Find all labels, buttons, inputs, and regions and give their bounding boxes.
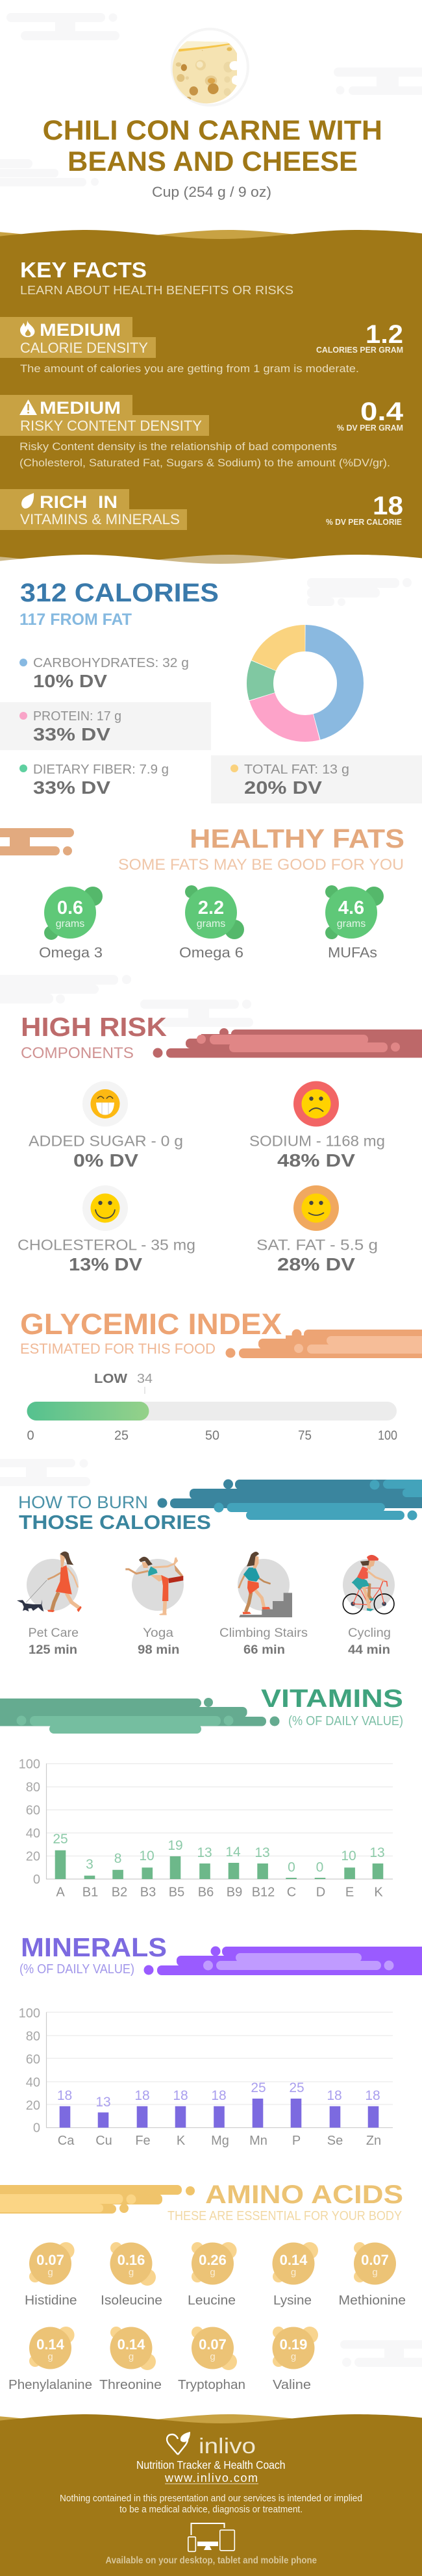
bubble: lysine: g [291, 2267, 296, 2278]
bubble: methionine: 0.07 [361, 2252, 389, 2268]
gauge: 34 [137, 1372, 153, 1386]
carbohydrates: CARBOHYDRATES: 32 g [33, 656, 189, 670]
bar chart: vitamins: B3 [140, 1885, 156, 1899]
fact: calorie density: 1.2 [366, 320, 403, 349]
activity: pet care: Pet Care [29, 1626, 79, 1640]
subheading: THESE ARE ESSENTIAL FOR YOUR BODY [168, 2209, 402, 2223]
bar chart: minerals: Se [327, 2134, 343, 2148]
bar chart: vitamins: 8 [114, 1851, 121, 1866]
decoration: teal bars [157, 1480, 422, 1520]
serving size: Cup (254 g / 9 oz) [152, 184, 271, 200]
bubble: valine: Valine [273, 2378, 311, 2392]
dietary fiber: 33% DV [33, 777, 110, 798]
disclaimer: to be a medical advice, diagnosis or treatment. [119, 2504, 303, 2515]
title: CHILI CON CARNE WITH [43, 115, 382, 146]
icon: woman on bicycle [343, 1555, 395, 1614]
decoration: red bars [153, 1028, 422, 1057]
protein: PROTEIN: 17 g [33, 709, 121, 724]
bubble: isoleucine: Isoleucine [101, 2293, 162, 2308]
bubble: tryptophan: g [210, 2351, 216, 2362]
bar chart: vitamins: 14 [225, 1845, 241, 1860]
icon: leaf [21, 493, 34, 509]
heading: HIGH RISK [21, 1012, 167, 1042]
bubble: leucine: 0.26 [199, 2252, 227, 2268]
bubble: threonine: 0.14 [118, 2336, 145, 2353]
bubble: MUFAs: grams [337, 918, 366, 929]
bar chart: minerals: 20 [26, 2099, 40, 2113]
bar chart: vitamins: 80 [26, 1780, 40, 1795]
logo: inlivo: inlivo [199, 2434, 256, 2458]
bar chart: minerals: 0 [33, 2121, 40, 2136]
bar chart: vitamins: 13 [254, 1845, 270, 1860]
decoration: purple bars [144, 1946, 422, 1975]
bar chart: minerals: 18 [327, 2088, 342, 2103]
icon: flame [20, 320, 34, 337]
sodium: SODIUM - 1168 mg [249, 1133, 385, 1150]
icon: mild smile [301, 1194, 331, 1222]
bar chart: minerals: 18 [134, 2088, 150, 2103]
heading: HOW TO BURN [18, 1493, 148, 1512]
bubble: isoleucine: 0.16 [118, 2252, 145, 2268]
bar chart: vitamins: 0 [33, 1873, 40, 1887]
activity: yoga: 98 min [138, 1643, 179, 1657]
bar chart: vitamins: 20 [26, 1850, 40, 1864]
bar chart: minerals: 13 [95, 2095, 111, 2110]
bar chart: minerals: Mg [211, 2134, 229, 2148]
icon: warning [19, 399, 37, 415]
subheading: 117 FROM FAT [19, 611, 132, 629]
fact: risky content density: RISKY CONTENT DENSITY [20, 418, 202, 434]
bubble: leucine [188, 2242, 237, 2308]
fact: rich in vitamins: VITAMINS & MINERALS [20, 511, 180, 527]
bar chart: minerals: 18 [57, 2088, 72, 2103]
sodium: 48% DV [277, 1150, 355, 1170]
decoration: green bars [0, 1698, 279, 1734]
bar chart: vitamins: 0 [288, 1860, 295, 1875]
bar chart: vitamins: B2 [112, 1885, 127, 1899]
disclaimer [60, 2493, 362, 2515]
bar chart: vitamins: 3 [86, 1857, 93, 1872]
bar chart: vitamins: D [316, 1885, 325, 1899]
bar chart: vitamins: 10 [341, 1849, 356, 1863]
bar chart: minerals: Mn [249, 2134, 267, 2148]
activity: yoga: Yoga [143, 1626, 173, 1640]
bar chart: minerals: 100 [19, 2006, 40, 2021]
bubble: lysine: Lysine [273, 2293, 312, 2308]
panel: minerals [19, 1932, 422, 2148]
protein [19, 709, 121, 744]
heading: AMINO ACIDS [205, 2180, 403, 2209]
bubble: MUFAs: 4.6 [338, 898, 364, 918]
bar chart: minerals: K [177, 2134, 186, 2148]
availability note: Available on your desktop, tablet and mobile phone [105, 2555, 317, 2566]
decoration: yellow bars [0, 2185, 195, 2214]
subheading: ESTIMATED FOR THIS FOOD [20, 1341, 216, 1357]
heading: GLYCEMIC INDEX [20, 1307, 282, 1341]
added sugar: ADDED SUGAR - 0 g [29, 1133, 183, 1150]
bar chart: minerals: 60 [26, 2052, 40, 2067]
total fat [230, 763, 349, 798]
bubble: valine: g [291, 2351, 296, 2362]
fact: calorie density: MEDIUM [40, 320, 121, 340]
bar chart: minerals: Fe [135, 2134, 151, 2148]
bubble: omega 3: 0.6 [57, 898, 83, 918]
bubble: isoleucine [101, 2242, 162, 2308]
bar chart: minerals: P [292, 2134, 301, 2148]
fact: risky content density [0, 395, 404, 469]
bubble: tryptophan: Tryptophan [178, 2378, 245, 2392]
icon: woman climbing stairs [238, 1552, 292, 1617]
header [43, 28, 382, 200]
cholesterol [18, 1185, 195, 1274]
bubble: valine: 0.19 [280, 2336, 307, 2353]
bubble: omega 6: Omega 6 [179, 944, 243, 961]
bubble: omega 3 [39, 887, 103, 961]
heading: 312 CALORIES [20, 579, 219, 607]
bubble: methionine: Methionine [339, 2293, 406, 2308]
subheading: (% OF DAILY VALUE) [288, 1714, 403, 1728]
bubble: valine [273, 2327, 318, 2392]
fact: risky content density: (Cholesterol, Saturated Fat, Sugars & Sodium) to the amount (%DV/gr). [19, 457, 390, 469]
title: BEANS AND CHEESE [68, 146, 358, 177]
bar chart: vitamins: B12 [252, 1885, 275, 1899]
bar chart: vitamins: 25 [53, 1832, 68, 1847]
icon: cheese [171, 28, 249, 109]
heading: HEALTHY FATS [190, 824, 404, 853]
gauge: 75 [298, 1429, 312, 1443]
saturated fat: SAT. FAT - 5.5 g [256, 1237, 378, 1254]
bubble: phenylalanine: 0.14 [36, 2336, 65, 2353]
activity: cycling: Cycling [348, 1626, 391, 1640]
bubble: threonine: Threonine [99, 2378, 162, 2392]
fact: rich in vitamins: 18 [373, 492, 403, 520]
activity: climbing stairs: Climbing Stairs [219, 1626, 308, 1640]
fact: rich in vitamins [0, 489, 403, 530]
bar chart: vitamins: B6 [198, 1885, 214, 1899]
bar chart: minerals [19, 2006, 393, 2148]
added sugar: 0% DV [73, 1150, 138, 1170]
tagline: Nutrition Tracker & Health Coach [136, 2458, 286, 2471]
bar chart: vitamins: B9 [227, 1885, 242, 1899]
cholesterol: CHOLESTEROL - 35 mg [18, 1237, 195, 1254]
bubble: tryptophan [178, 2327, 245, 2392]
fact: calorie density [0, 317, 403, 375]
bubble: MUFAs [325, 885, 384, 961]
activity: pet care: 125 min [29, 1643, 77, 1657]
heading: VITAMINS [261, 1685, 403, 1713]
bar chart: vitamins: 13 [197, 1845, 212, 1860]
bubble: methionine [339, 2242, 406, 2308]
bar chart: vitamins: 13 [369, 1845, 385, 1860]
heading: MINERALS [21, 1932, 167, 1962]
gauge: 100 [378, 1429, 397, 1443]
activity: climbing stairs: 66 min [243, 1643, 285, 1657]
fact: risky content density: MEDIUM [40, 398, 121, 418]
bar chart: minerals: 25 [251, 2080, 266, 2095]
panel: how to burn: THOSE CALORIES [19, 1511, 211, 1534]
bar chart: vitamins: 100 [19, 1758, 40, 1772]
activity: climbing stairs [219, 1552, 308, 1657]
panel: key facts [0, 230, 422, 575]
activity: cycling [343, 1555, 395, 1657]
panel: amino acids [0, 2180, 406, 2392]
bubble: MUFAs: MUFAs [328, 944, 377, 961]
bar chart: minerals: 18 [365, 2088, 380, 2103]
bubble: tryptophan: 0.07 [199, 2336, 227, 2353]
icon: grinning face [91, 1089, 119, 1118]
panel: high risk [18, 1012, 422, 1274]
fact: calorie density: The amount of calories you are getting from 1 gram is moderate. [20, 362, 359, 375]
added sugar [29, 1081, 183, 1170]
dietary fiber: DIETARY FIBER: 7.9 g [33, 763, 169, 777]
saturated fat [256, 1185, 378, 1274]
bubble: histidine [25, 2242, 77, 2308]
icon: woman walking dog [17, 1552, 82, 1612]
bar chart: vitamins: 10 [139, 1849, 155, 1863]
title [43, 115, 382, 177]
heading: KEY FACTS [20, 258, 147, 282]
bubble: histidine: Histidine [25, 2293, 77, 2308]
bubble: lysine [273, 2242, 318, 2308]
activity: yoga [125, 1557, 184, 1657]
bar chart: minerals: 25 [289, 2080, 304, 2095]
gauge: 25 [114, 1429, 129, 1443]
bubble: phenylalanine: g [47, 2351, 53, 2362]
activity: cycling: 44 min [348, 1643, 390, 1657]
cholesterol: 13% DV [69, 1254, 142, 1274]
bar chart: vitamins: E [345, 1885, 354, 1899]
bar chart: minerals: 80 [26, 2030, 40, 2044]
bubble: omega 6 [179, 885, 244, 961]
bar chart: vitamins: 40 [26, 1826, 40, 1841]
bar chart: minerals: Cu [95, 2134, 112, 2148]
donut chart [260, 638, 351, 729]
bubble: phenylalanine [8, 2327, 92, 2392]
icon: woman doing yoga [125, 1557, 184, 1615]
subheading: COMPONENTS [21, 1044, 134, 1062]
bubble: phenylalanine: Phenylalanine [8, 2378, 92, 2392]
bubble: omega 6: grams [197, 918, 225, 929]
fact: calorie density: CALORIES PER GRAM [316, 345, 403, 355]
panel: how to burn [17, 1480, 422, 1657]
website: www.inlivo.com [164, 2471, 258, 2484]
bubble: omega 3: grams [56, 918, 84, 929]
protein: 33% DV [33, 724, 110, 744]
bar chart: vitamins: 60 [26, 1803, 40, 1817]
sodium [249, 1081, 385, 1170]
bar chart: vitamins: B5 [169, 1885, 184, 1899]
bar chart: minerals: 18 [211, 2088, 227, 2103]
bar chart: minerals: Ca [58, 2134, 75, 2148]
bubble: leucine: Leucine [188, 2293, 236, 2308]
dietary fiber [19, 763, 169, 798]
icon: sad face [301, 1089, 331, 1118]
panel: vitamins [0, 1685, 403, 1899]
bubble: threonine [99, 2327, 162, 2392]
fact: rich in vitamins: RICH IN [40, 492, 118, 512]
bar chart: vitamins: K [374, 1885, 383, 1899]
disclaimer: Nothing contained in this presentation and our services is intended or implied [60, 2493, 362, 2504]
icon: heart with leaf [167, 2432, 190, 2455]
subheading: SOME FATS MAY BE GOOD FOR YOU [118, 856, 404, 874]
panel: glycemic index [20, 1307, 422, 1443]
gauge: LOW [94, 1372, 127, 1386]
logo: inlivo [167, 2432, 256, 2458]
bar chart: minerals: 40 [26, 2076, 40, 2090]
saturated fat: 28% DV [277, 1254, 355, 1274]
icon: devices [188, 2523, 234, 2551]
fact: risky content density: Risky Content density is the relationship of bad components [19, 440, 337, 453]
bar chart: vitamins: B1 [82, 1885, 98, 1899]
panel: calories [0, 579, 422, 803]
gauge [27, 1372, 397, 1443]
bar chart: minerals: Zn [366, 2134, 381, 2148]
decoration: orange bars [226, 1329, 422, 1358]
bar chart: vitamins: C [287, 1885, 296, 1899]
bubble: isoleucine: g [129, 2267, 134, 2278]
subheading: LEARN ABOUT HEALTH BENEFITS OR RISKS [20, 283, 293, 297]
bar chart: vitamins [19, 1758, 393, 1899]
bubble: omega 6: 2.2 [198, 898, 224, 918]
bar chart: vitamins: 19 [168, 1838, 183, 1853]
icon: smiling face [91, 1194, 119, 1222]
bubble: omega 3: Omega 3 [39, 944, 103, 961]
panel: footer [0, 2414, 422, 2576]
carbohydrates [19, 656, 189, 691]
activity: pet care [17, 1552, 82, 1657]
carbohydrates: 10% DV [33, 671, 107, 691]
total fat: TOTAL FAT: 13 g [244, 763, 349, 777]
bubble: leucine: g [210, 2267, 216, 2278]
fact: calorie density: CALORIE DENSITY [20, 340, 148, 356]
bar chart: vitamins: 0 [316, 1860, 323, 1875]
gauge: 0 [27, 1429, 34, 1443]
bar chart: vitamins: A [56, 1885, 65, 1899]
fact: rich in vitamins: % DV PER CALORIE [326, 517, 402, 527]
panel: healthy fats [0, 824, 404, 961]
bubble: threonine: g [129, 2351, 134, 2362]
bubble: histidine: 0.07 [36, 2252, 64, 2268]
bar chart: minerals: 18 [173, 2088, 188, 2103]
bubble: lysine: 0.14 [280, 2252, 308, 2268]
gauge: 50 [205, 1429, 219, 1443]
fact: risky content density: 0.4 [360, 398, 404, 426]
bubble: histidine: g [47, 2267, 53, 2278]
decoration: orange bars [0, 828, 74, 855]
subheading: (% OF DAILY VALUE) [19, 1962, 134, 1976]
bubble: methionine: g [372, 2267, 378, 2278]
total fat: 20% DV [244, 777, 322, 798]
fact: risky content density: % DV PER GRAM [337, 423, 403, 433]
